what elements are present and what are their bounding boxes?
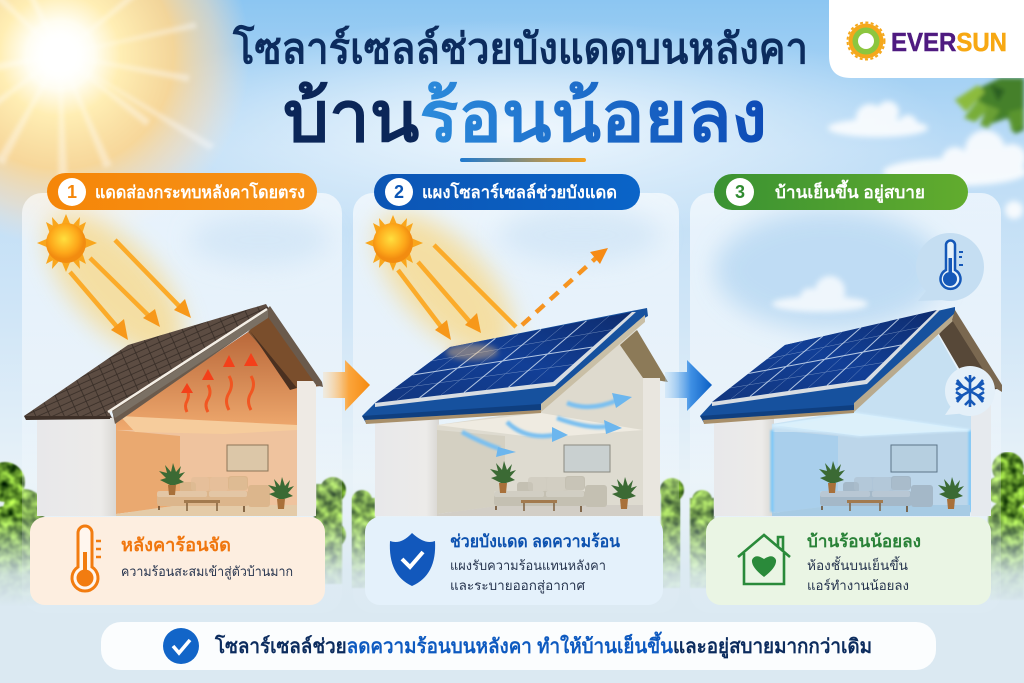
title [232,24,808,156]
pill heading: step 1: 1 [67,182,77,202]
card body: ห้องชั้นบนเย็นขึ้น [807,556,908,573]
summary text: โซลาร์เซลล์ช่วยลดความร้อนบนหลังคา ทำให้บ้านเย็นขึ้นและอยู่สบายมากกว่าเดิม [214,631,872,660]
walls [714,418,774,516]
card: house is cooler [706,517,991,605]
interior room [772,428,972,513]
house 3 [700,307,1002,516]
cloud in panel 3 [772,276,868,312]
card heading: บ้านร้อนน้อยลง [807,532,921,551]
sofa [494,476,607,512]
attic [116,332,297,430]
arrow: step 1 to step 2 [323,360,370,411]
walls [375,418,439,516]
gable wall [772,335,972,432]
sofa [157,476,270,512]
pill heading: step 1 [47,173,317,210]
right pillar [297,381,316,516]
card body: แผงรับความร้อนแทนหลังคา [450,558,606,573]
house 1 [24,304,323,516]
card: blocks the sun: และระบายออกสู่อากาศ [450,578,586,594]
pill heading: step 2 [374,174,640,210]
solar panels [375,312,636,407]
right pillar [643,378,660,516]
card heading: ช่วยบังแดด ลดความร้อน [450,532,620,551]
painting [891,445,937,472]
painting [227,445,268,471]
clouds [828,101,1024,219]
icon: check circle [163,628,199,664]
icon: thermometer [72,526,101,591]
pill heading: step 2: 2 [394,182,404,202]
card heading: หลังคาร้อนจัด [121,535,231,555]
roof shingles [24,304,269,418]
arrow: reflected heat [522,248,608,325]
plants [490,461,516,493]
panel: step 2 background [353,193,679,613]
card: house is cooler: แอร์ทำงานน้อยลง [807,578,909,593]
plants [159,463,185,495]
pill heading: step 3: บ้านเย็นขึ้น อยู่สบาย [775,179,925,204]
trees row [0,452,1024,683]
plants [819,461,845,493]
title underline [460,158,586,162]
card body: ความร้อนสะสมเข้าสู่ตัวบ้านมาก [121,564,293,580]
icon: shield check [390,533,435,586]
solar panels [712,310,940,406]
left wall [37,417,117,516]
blue roof [362,308,648,423]
panel: step 1 background [22,193,342,613]
panel: step 3 background [690,193,1001,613]
pill heading: step 1: แดดส่องกระทบหลังคาโดยตรง [95,182,305,202]
roof underside [939,318,1001,394]
sofa [820,476,933,512]
icon: sun [37,214,97,272]
pill heading: step 3: 3 [735,182,745,202]
airflow arrows [462,400,618,449]
icon: house with heart [738,535,790,584]
heat arrows [186,376,254,412]
interior room [116,428,298,514]
gable wall [437,330,643,430]
icon: eversun logo mark [848,22,884,60]
gable fascia [112,306,323,424]
card: roof very hot [30,517,325,605]
arrows: sun rays [398,245,516,328]
summary bar [101,622,936,670]
arrow: step 2 to step 3 [665,360,712,411]
roof underside [620,330,668,382]
house 2 [362,308,668,516]
roof underside [248,312,322,388]
title line 1: โซลาร์เซลล์ช่วยบังแดดบนหลังคา [232,24,808,72]
step 1 sun and rays [23,191,207,379]
icon: sun [365,215,423,271]
interior room [437,428,644,514]
icon: thermometer bubble [916,233,984,301]
card: blocks the sun [365,517,663,605]
logo card [829,0,1024,78]
step 2 sun and rays [353,191,608,379]
painting [564,445,610,472]
arrows: sun rays [70,240,180,328]
blue roof [700,307,955,423]
logo wordmark: EVERSUN [891,27,1007,57]
right pillar [971,394,991,516]
leaves [954,78,1024,134]
pill heading: step 3 [714,174,968,210]
title line 2: บ้านร้อนน้อยลง [283,78,767,156]
pill heading: step 2: แผงโซลาร์เซลล์ช่วยบังแดด [422,182,617,202]
icon: snowflake bubble [945,366,995,416]
